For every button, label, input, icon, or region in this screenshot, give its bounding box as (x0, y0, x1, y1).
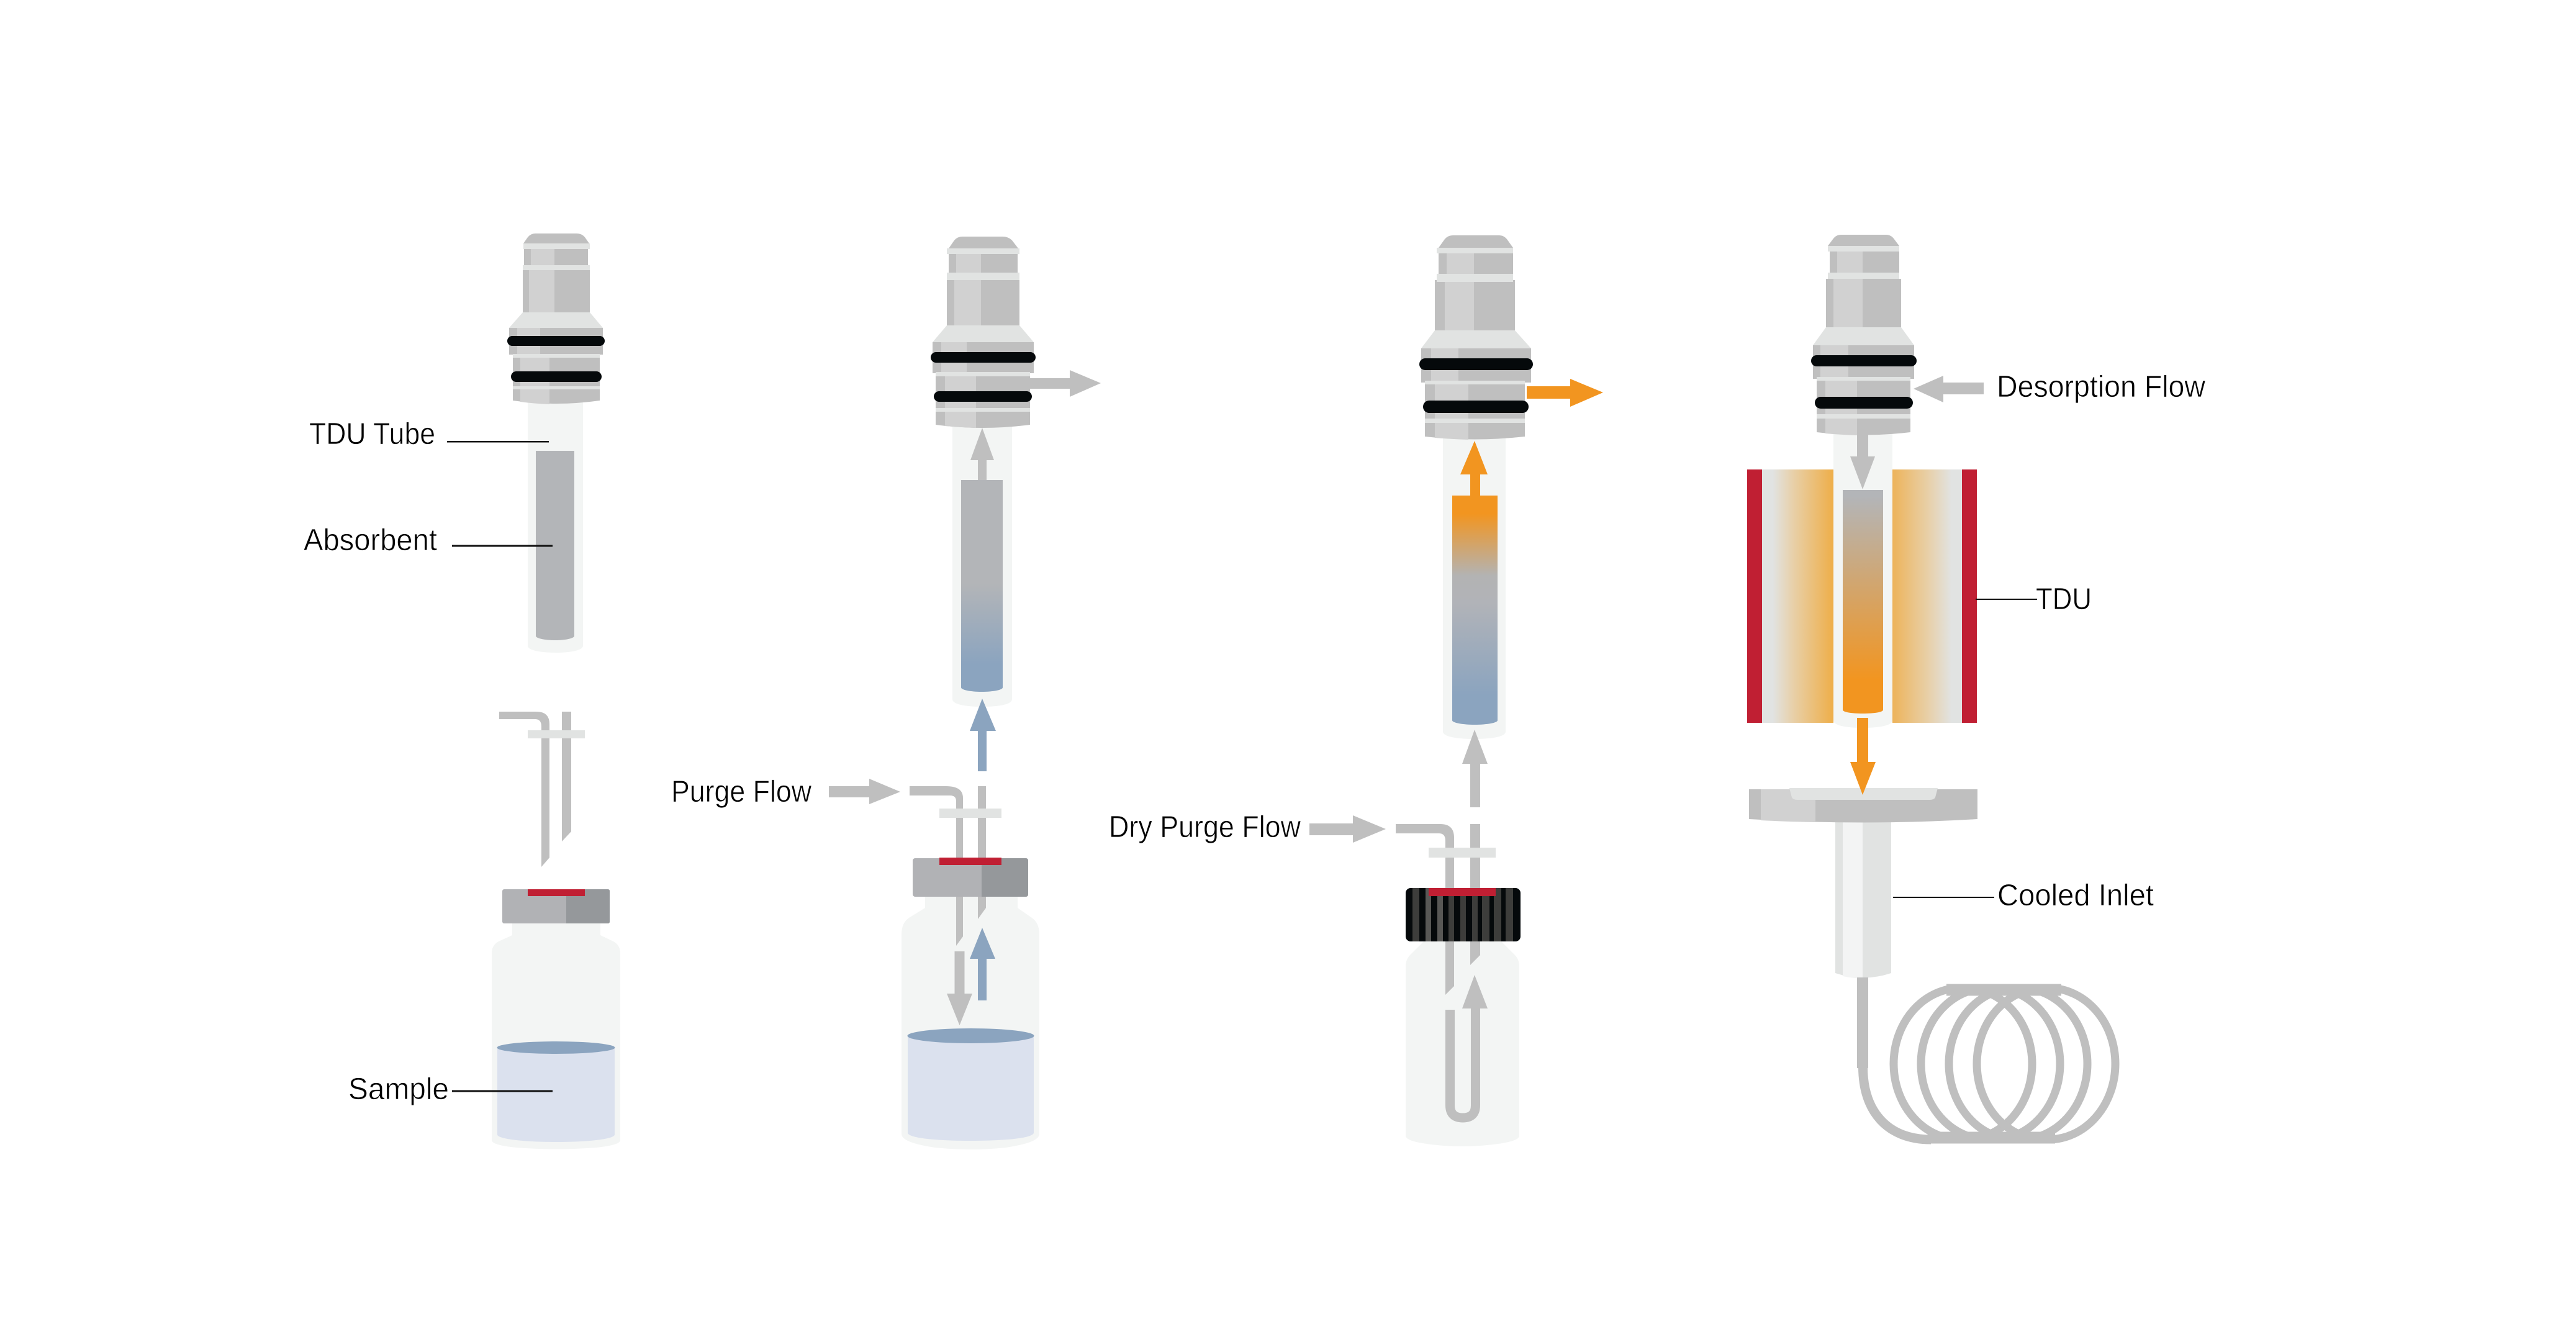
label: Desorption Flow with arrow (1914, 370, 2206, 404)
panel: step 3 dry purge (1109, 235, 1603, 1146)
purge needles (910, 786, 1001, 946)
label: Sample (348, 1072, 553, 1106)
arrow: orange flow up (1460, 441, 1488, 496)
tube head fitting (931, 237, 1036, 428)
inlet flange disc (1749, 788, 1977, 822)
panel: step 1 sampling setup (304, 233, 620, 1149)
vial cap (913, 858, 1028, 897)
arrow: gray flow into tube (1462, 730, 1488, 807)
absorbent with orange and blue bands (1452, 496, 1498, 725)
purge needles (499, 712, 585, 867)
arrow: gray flow down (1850, 435, 1875, 489)
arrow: gas down into sample (947, 951, 972, 1025)
vial glass (902, 897, 1039, 1149)
arrow: orange vent right (1527, 379, 1603, 407)
capillary column coil (1863, 977, 2115, 1140)
TDU tube glass (1833, 428, 1892, 728)
TDU tube glass (952, 422, 1012, 707)
arrow: flow up out of absorbent (970, 428, 994, 480)
label: Absorbent: Absorbent (304, 523, 437, 557)
panel: step 2 purge (671, 237, 1101, 1149)
vial cap (502, 889, 610, 923)
label: Purge Flow with arrow: Purge Flow (671, 775, 812, 809)
absorbent (536, 451, 574, 640)
TDU tube glass (528, 397, 583, 653)
absorbent with blue analyte band (961, 480, 1003, 692)
arrow: blue flow into tube (970, 699, 996, 771)
label: Dry Purge Flow with arrow: Dry Purge Flow (1109, 810, 1301, 844)
TDU tube glass (1443, 435, 1506, 739)
label: Sample: Sample (348, 1072, 449, 1106)
label: TDU: TDU (2036, 582, 2092, 616)
label: Cooled Inlet: Cooled Inlet (1997, 879, 2154, 912)
label: Absorbent (304, 523, 553, 557)
tube head fitting (507, 233, 605, 404)
arrow: orange flow to inlet (1850, 718, 1876, 795)
sample liquid (497, 1041, 615, 1142)
black ribbed cap (1406, 888, 1521, 941)
arrow: vent flow right (1030, 370, 1101, 397)
tube head fitting (1419, 235, 1533, 440)
sample liquid (908, 1028, 1034, 1141)
label: Purge Flow with arrow (671, 775, 900, 809)
purge needles (1396, 824, 1496, 995)
label: Desorption Flow with arrow: Desorption Flow (1997, 370, 2206, 404)
label: TDU Tube: TDU Tube (309, 417, 435, 451)
TDU heater block (1747, 469, 1977, 723)
U-shaped dry purge tube with arrow (1450, 975, 1488, 1118)
tube head fitting (1811, 235, 1917, 435)
vial glass (1406, 941, 1519, 1146)
panel: step 4 desorption (1747, 235, 2206, 1140)
sample vial glass (492, 923, 620, 1149)
absorbent heated gradient (1843, 490, 1883, 714)
arrow: blue vapour up (970, 928, 995, 1000)
cooled inlet column (1835, 820, 1891, 979)
